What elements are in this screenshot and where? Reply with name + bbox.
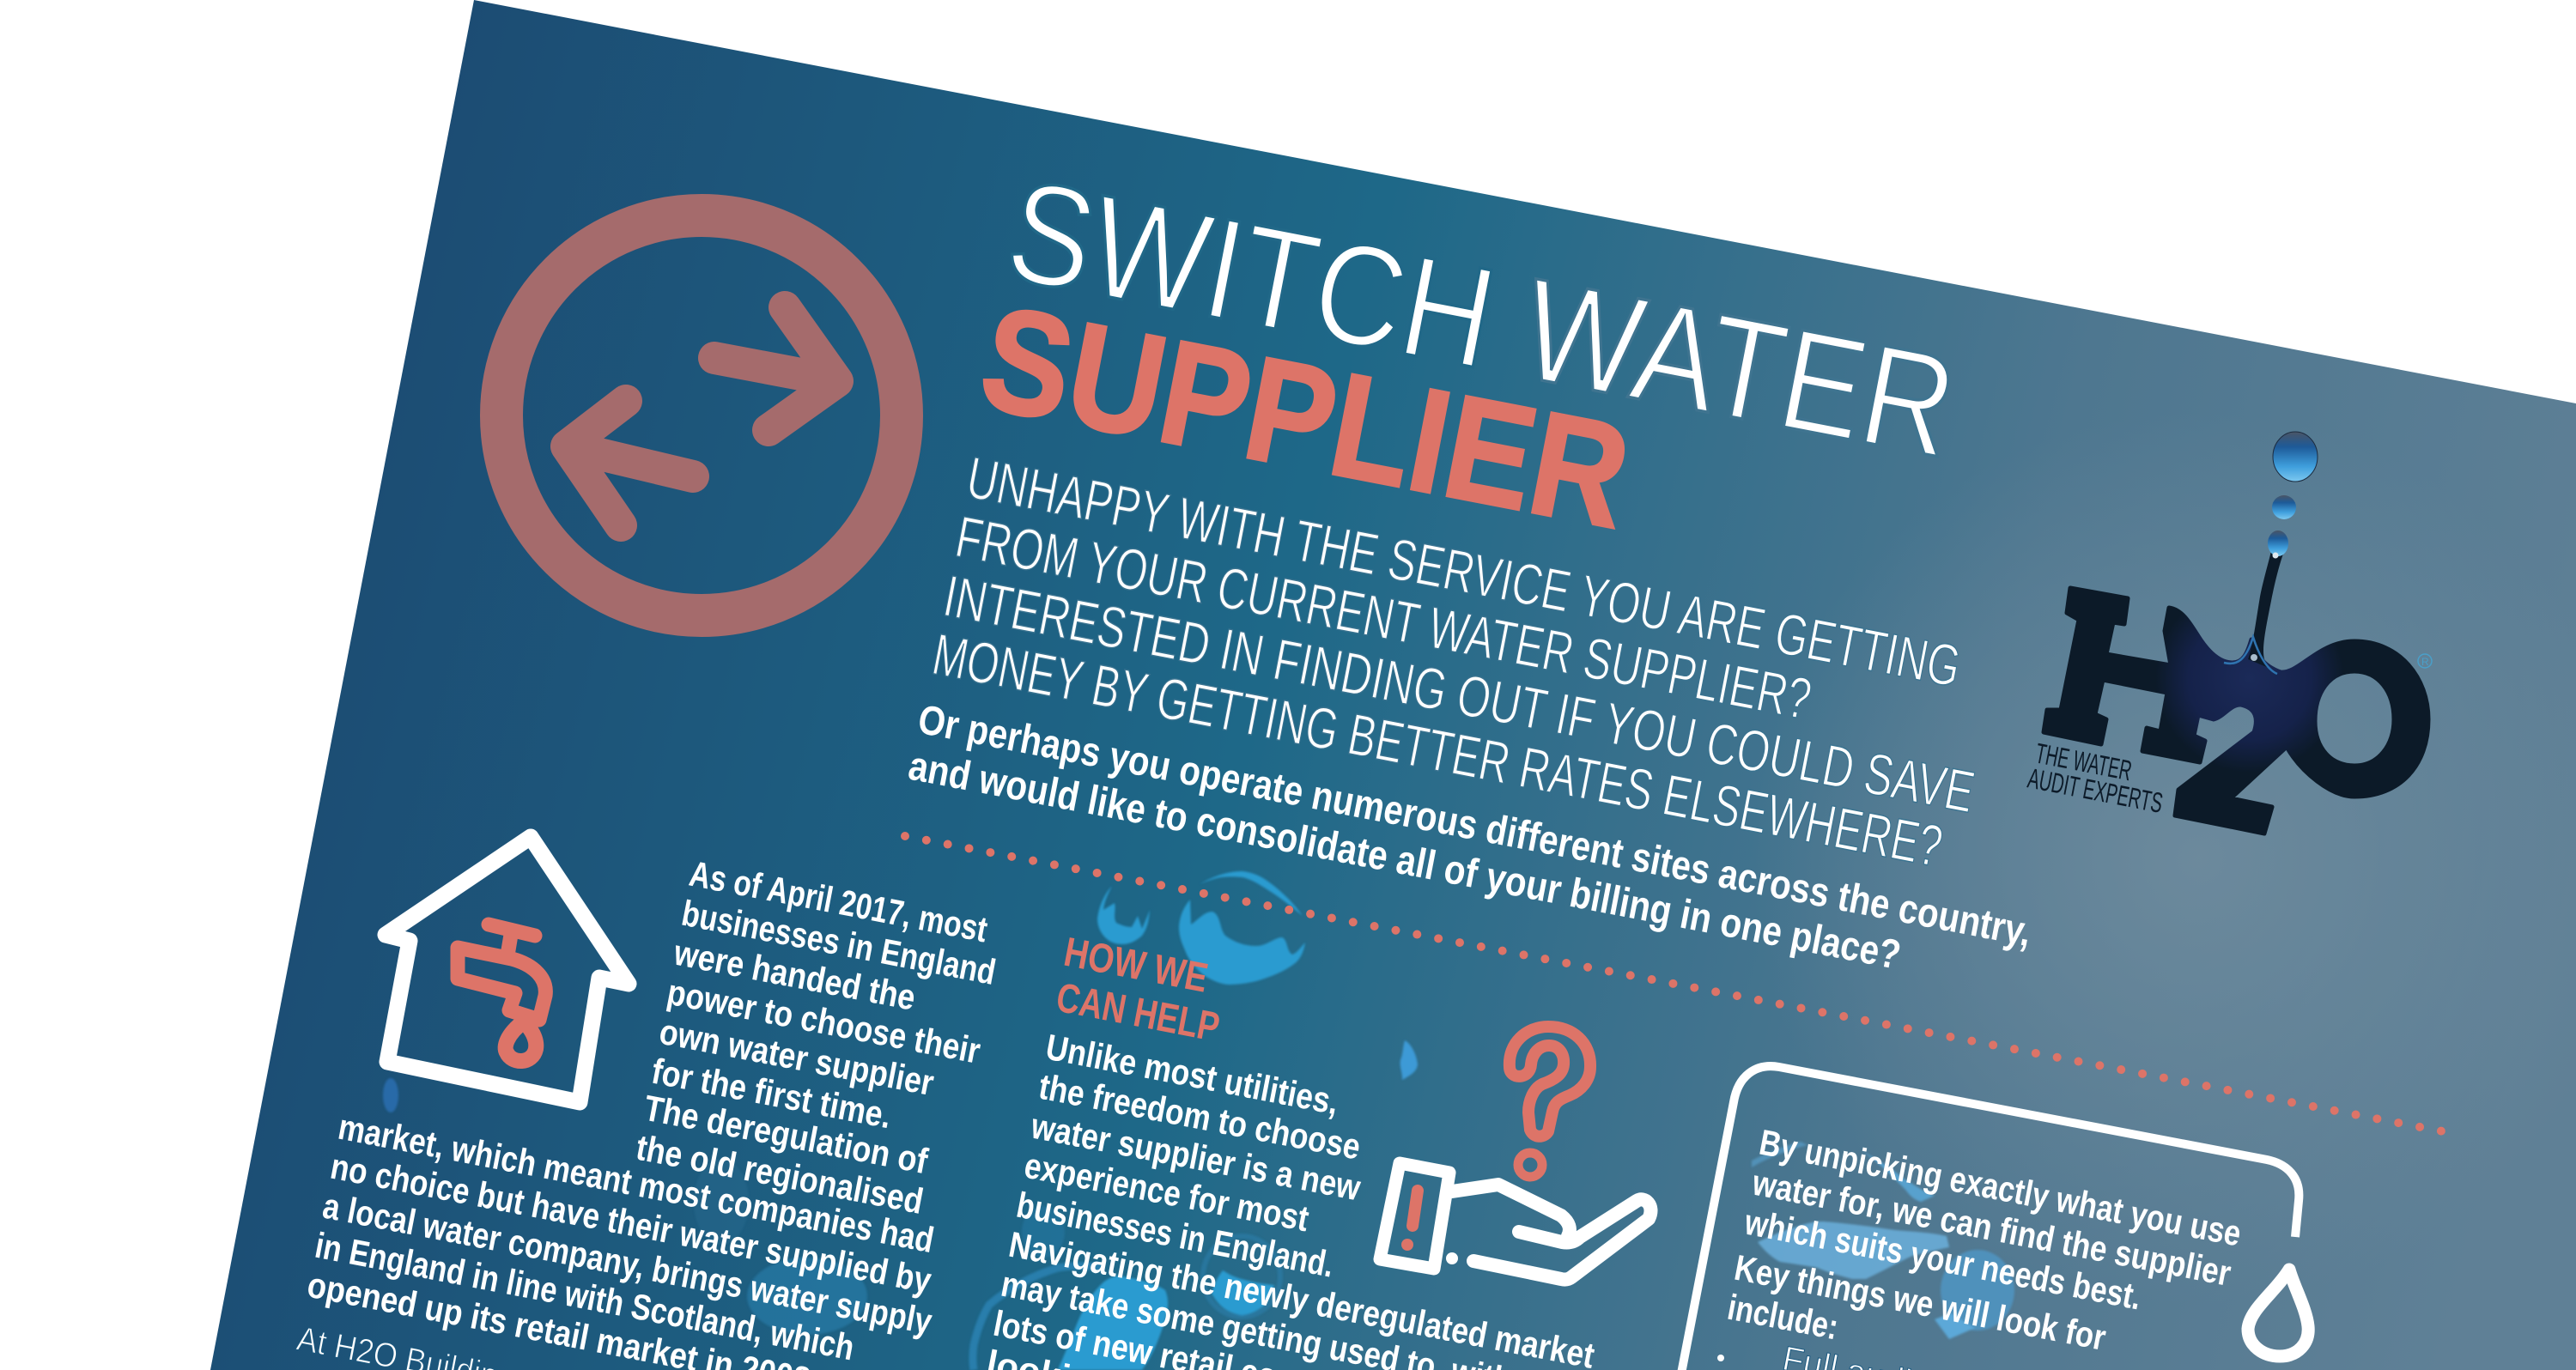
question mark <box>1510 1027 1590 1137</box>
logo: H2O <box>2026 432 2432 834</box>
panel text: water for, we can find the supplier <box>1748 1162 2234 1294</box>
subheading: MONEY BY GETTING BETTER RATES ELSEWHERE? <box>927 621 1947 880</box>
icon: hand with phone and question mark <box>1380 1027 1650 1280</box>
hand <box>1452 1185 1650 1280</box>
water drop <box>506 1021 536 1061</box>
logo tagline: THE WATER <box>2033 737 2135 786</box>
text: intro column: for the first time. <box>648 1051 895 1136</box>
text: intro column: market, which meant most companies had <box>335 1106 937 1260</box>
icon: switch arrows in circle <box>501 215 902 615</box>
subheading: UNHAPPY WITH THE SERVICE YOU ARE GETTING <box>962 445 1965 700</box>
panel text <box>1717 1122 2245 1370</box>
text: intro column: power to choose their <box>664 972 984 1071</box>
icon: house with tap <box>386 837 629 1102</box>
text: intro column: businesses in England <box>678 893 999 992</box>
logo water spout <box>2248 551 2284 668</box>
question dot <box>1518 1153 1542 1177</box>
text: intro column <box>294 853 999 1370</box>
text: intro column: no choice but have their water supplied by <box>327 1146 935 1300</box>
phone <box>1380 1163 1449 1269</box>
subheading: INTERESTED IN FINDING OUT IF YOU COULD SAVE <box>939 563 1980 825</box>
title: SWITCH WATER <box>996 150 1967 488</box>
panel text: By unpicking exactly what you use <box>1756 1122 2245 1254</box>
exclamation mark <box>1413 1191 1418 1226</box>
house outline <box>386 837 629 1102</box>
panel text: Key things we will look for <box>1731 1247 2109 1358</box>
logo droplets <box>2251 432 2318 661</box>
text: how we can help column: businesses in England. <box>1013 1185 1337 1285</box>
tap <box>458 924 545 1020</box>
panel: key things <box>1681 1066 2308 1370</box>
text: intro column: a local water company, brings water supply <box>319 1185 936 1342</box>
panel outline <box>1681 1066 2299 1370</box>
text: how we can help column: water supplier is a new <box>1027 1106 1364 1208</box>
dotted divider <box>905 836 2447 1132</box>
text: intro column: As of April 2017, most <box>686 853 991 949</box>
text: how we can help column: the freedom to choose <box>1036 1066 1364 1167</box>
heading: how we can help: CAN HELP <box>1053 975 1223 1051</box>
title: SUPPLIER <box>969 275 1642 560</box>
panel text: include: <box>1724 1287 1842 1347</box>
logo tagline <box>2026 737 2166 819</box>
lead text: and would like to consolidate all of your billing in one place? <box>905 743 1905 979</box>
heading: how we can help <box>1053 930 1223 1051</box>
heading: how we can help: HOW WE <box>1060 930 1212 1002</box>
subheading: FROM YOUR CURRENT WATER SUPPLIER? <box>951 504 1816 732</box>
icon: panel water drop <box>2248 1270 2308 1356</box>
lead text: Or perhaps you operate numerous different sites across the country, <box>914 697 2035 955</box>
subheading <box>927 445 1980 880</box>
panel text: which suits your needs best. <box>1741 1202 2145 1318</box>
text: how we can help column <box>983 1027 1598 1370</box>
text: how we can help column: experience for most <box>1021 1145 1312 1239</box>
registered mark: R <box>2421 656 2429 668</box>
text: intro column: were handed the <box>670 932 919 1018</box>
text: intro column: The deregulation of <box>641 1088 932 1181</box>
logo letters <box>2044 588 2428 834</box>
text: intro column: the old regionalised <box>633 1127 927 1221</box>
water bubbles background <box>383 871 2014 1370</box>
text: intro column: own water supplier <box>656 1011 937 1103</box>
logo tagline: AUDIT EXPERTS <box>2026 762 2166 819</box>
registered mark <box>2418 654 2432 668</box>
text: how we can help column: Unlike most utilities, <box>1042 1027 1342 1122</box>
